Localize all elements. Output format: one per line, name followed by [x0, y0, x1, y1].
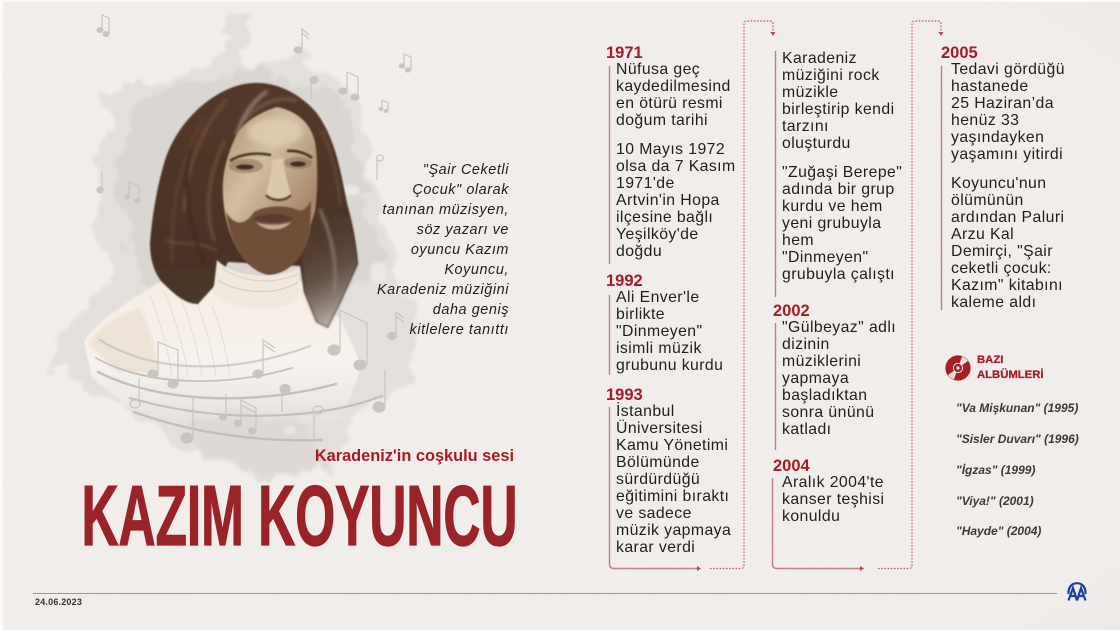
- subtitle: Karadeniz'in coşkulu sesi: [315, 447, 514, 465]
- timeline column 3: [941, 44, 1065, 311]
- year 2004: 2004: [773, 457, 810, 475]
- text group: "Zuğaşi Berepe" adında bir grup kurdu ve hem yeni grubuyla hem "Dinmeyen" grubuyla çalıştı: [782, 164, 902, 283]
- year 1992: 1992: [606, 272, 643, 290]
- year 2002: 2002: [773, 302, 810, 320]
- hair strands: [166, 92, 340, 296]
- year 1993: 1993: [606, 386, 643, 404]
- face: [223, 107, 317, 274]
- beard: [226, 200, 311, 275]
- date: 24.06.2023: [35, 597, 82, 607]
- ink splash: [56, 12, 420, 482]
- intro text: "Şair Ceketli Çocuk" olarak tanınan müzisyen, söz yazarı ve oyuncu Kazım Koyuncu, Karadeniz müziğini daha geniş kitlelere tanıttı: [377, 162, 509, 338]
- text 2005: Tedavi gördüğü hastanede 25 Haziran’da henüz 33 yaşındayken yaşamını yitirdi: [951, 61, 1065, 163]
- albums title: BAZI ALBÜMLERİ: [977, 354, 1044, 381]
- year 2005: 2005: [941, 44, 978, 62]
- albums list: [956, 401, 1079, 538]
- albums list: "Hayde" (2004): [956, 524, 1041, 538]
- text 1971 birth: 10 Mayıs 1972 olsa da 7 Kasım 1971'de Artvin'in Hopa ilçesine bağlı Yeşilköy'de doğdu: [616, 141, 736, 260]
- footer rule: [33, 593, 1057, 594]
- text legacy: Koyuncu'nun ölümünün ardından Paluri Arzu Kal Demirçi, "Şair ceketli çocuk: Kazım" kitabını kaleme aldı: [951, 175, 1064, 311]
- text 2004: Aralık 2004'te kanser teşhisi konuldu: [782, 474, 884, 525]
- year 1971: 1971: [606, 44, 643, 62]
- turtleneck: [213, 260, 300, 309]
- text 1971: Nüfusa geç kaydedilmesind en ötürü resmi doğum tarihi: [616, 61, 731, 129]
- portrait: [84, 83, 362, 425]
- title: KAZIM KOYUNCU: [82, 469, 518, 564]
- timeline column 1: [606, 44, 736, 556]
- albums list: "Sisler Duvarı" (1996): [956, 432, 1079, 446]
- features: [229, 151, 312, 230]
- icon: AA logo: [1067, 582, 1087, 601]
- albums list: "Va Mişkunan" (1995): [956, 401, 1078, 415]
- albums heading: [945, 354, 1044, 381]
- forehead highlight: [247, 118, 303, 146]
- sweater: [84, 270, 362, 425]
- music staff: [96, 340, 382, 440]
- hair back: [150, 83, 358, 328]
- text 1993: İstanbul Üniversitesi Kamu Yönetimi Bölümünde sürdürdüğü eğitimini bıraktı ve sadece müzik yapmaya karar verdi: [616, 403, 731, 556]
- albums list: "İgzas" (1999): [956, 463, 1035, 477]
- paint specks: [284, 185, 386, 434]
- albums list: "Viya!" (2001): [956, 494, 1034, 508]
- timeline column 2: [773, 50, 902, 525]
- music notes: [97, 15, 411, 443]
- icon: cd: [945, 355, 971, 381]
- text 1992: Ali Enver'le birlikte "Dinmeyen" isimli müzik grubunu kurdu: [616, 289, 723, 374]
- text 2002: "Gülbeyaz" adlı dizinin müziklerini yapmaya başladıktan sonra ününü katladı: [782, 319, 896, 438]
- text rock: Karadeniz müziğini rock müzikle birleştirip kendi tarzını oluşturdu: [782, 50, 894, 152]
